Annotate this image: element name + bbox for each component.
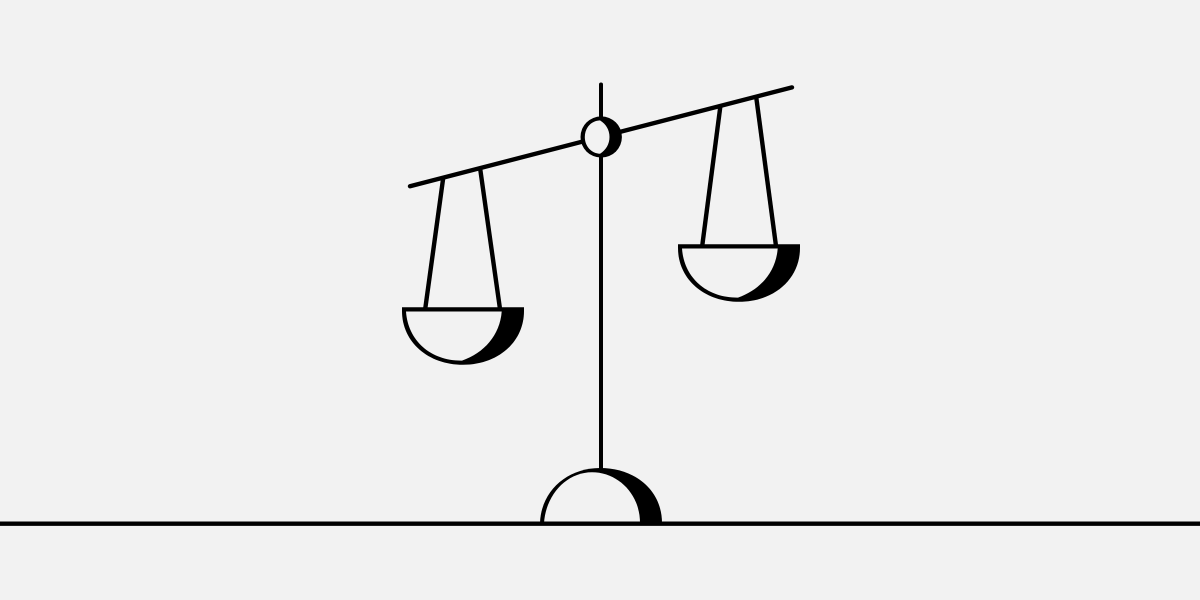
ground line [0, 522, 1200, 526]
icon: right pan with strings [678, 97, 800, 302]
icon: pivot [580, 116, 622, 158]
icon: dome base [540, 468, 662, 523]
icon: left pan with strings [402, 169, 524, 365]
icon: tilted beam [410, 87, 792, 186]
icon: vertical pole [599, 84, 603, 470]
